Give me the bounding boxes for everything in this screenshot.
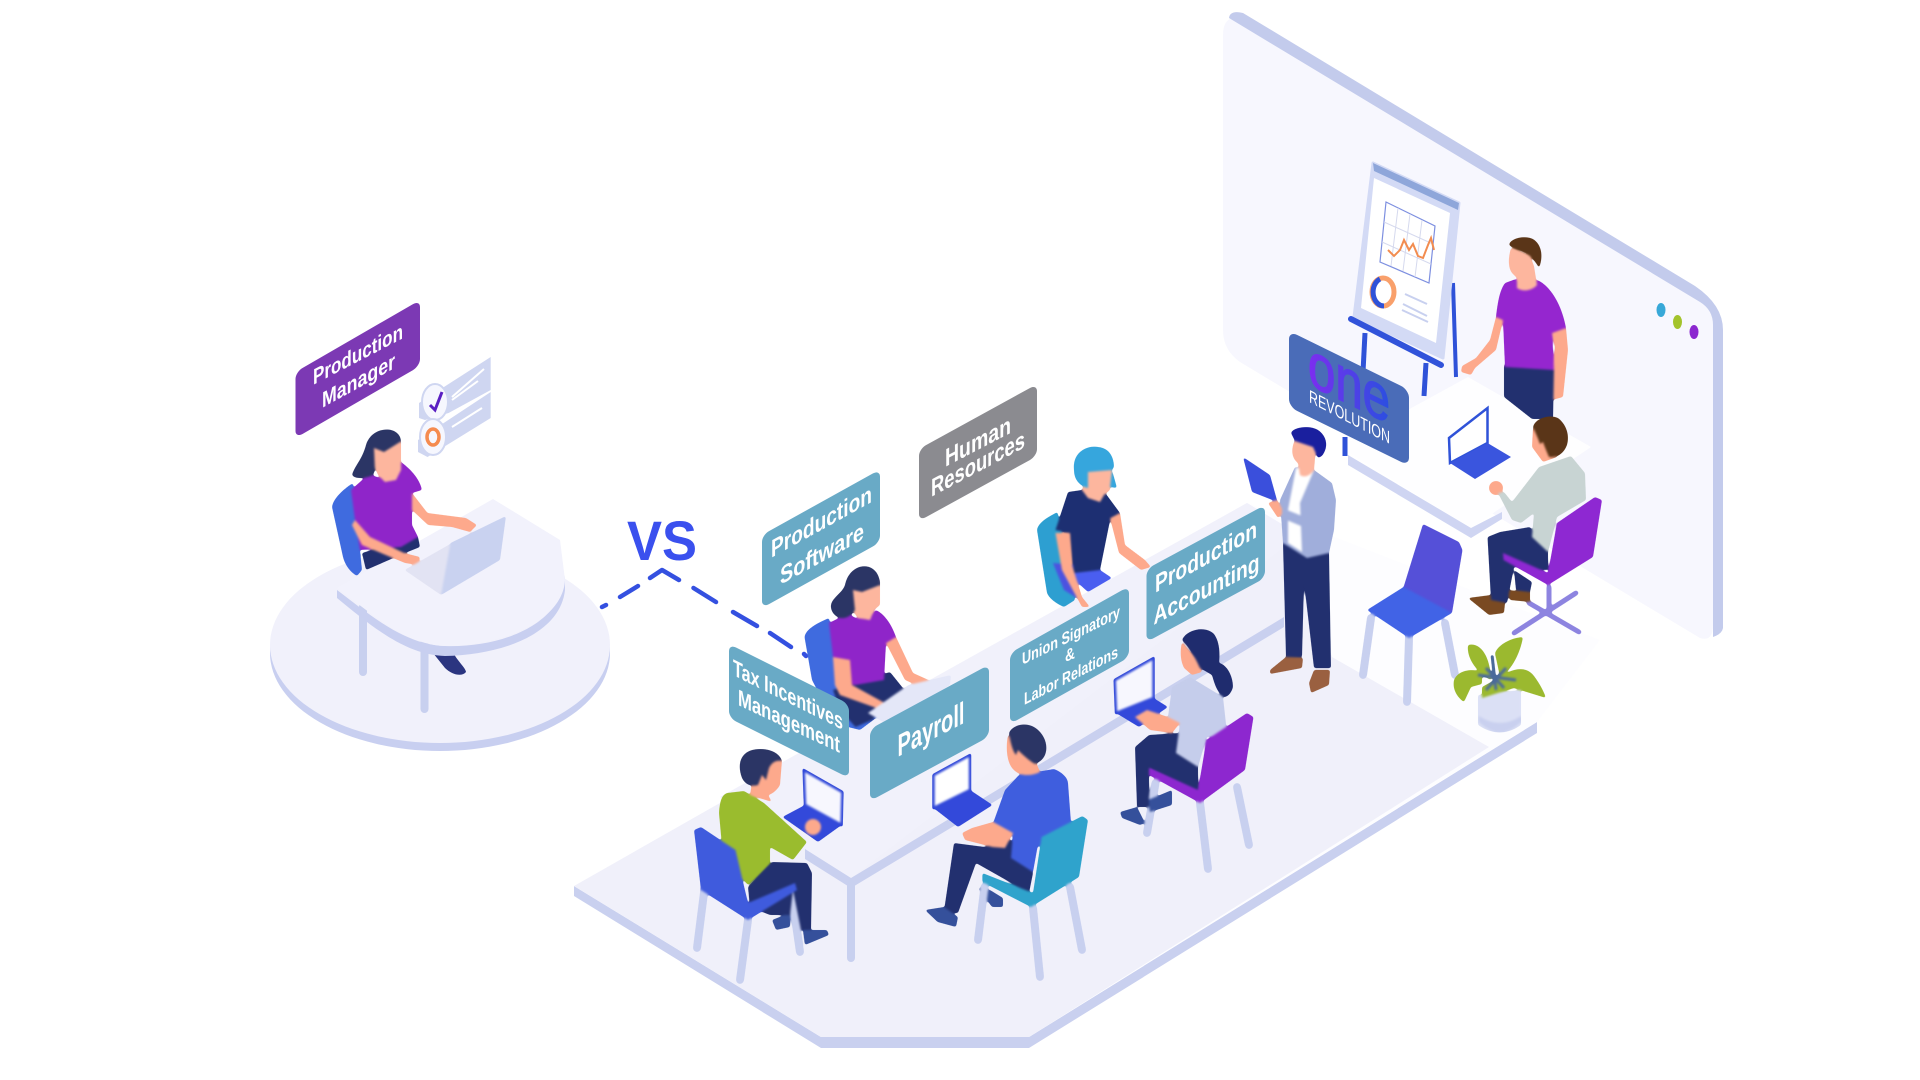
small desk with legs xyxy=(337,499,565,709)
VS heading: VS xyxy=(627,509,697,572)
sitting man with swivel chair xyxy=(1468,416,1602,633)
checklist icon xyxy=(418,357,491,457)
label: Tax Incentives Management: Management xyxy=(738,685,840,759)
line chart xyxy=(1380,202,1435,283)
standing man with tablet xyxy=(1243,427,1336,693)
label: Production Manager: Production xyxy=(313,318,403,390)
standing man in purple shirt xyxy=(1461,237,1568,419)
label: Tax Incentives Management xyxy=(729,644,849,778)
donut chart xyxy=(1372,278,1394,306)
label: Union Signatory and Labor Relations xyxy=(1010,586,1129,724)
label: Production Manager: Manager xyxy=(322,349,395,414)
label: Payroll: Payroll xyxy=(898,695,964,764)
laptop xyxy=(868,675,951,723)
label: Payroll xyxy=(870,665,989,801)
label: Production Manager xyxy=(296,300,420,438)
production manager figure xyxy=(332,429,506,595)
label: Production Software xyxy=(762,470,880,608)
laptop xyxy=(1115,658,1168,727)
laptop xyxy=(782,770,842,842)
label: Union Signatory and Labor Relations: & xyxy=(1065,643,1075,666)
label: Production Software: Production xyxy=(771,480,872,564)
label: Production Software: Software xyxy=(780,516,864,591)
easel with chart xyxy=(1351,163,1459,396)
floor platform xyxy=(574,503,1600,1048)
green-sweater man with chair and laptop xyxy=(694,749,842,980)
laptop on back desk xyxy=(1449,408,1511,479)
label: Human Resources: Resources xyxy=(931,425,1025,503)
back desk xyxy=(1340,377,1591,538)
label: Production Accounting: Production xyxy=(1155,515,1257,599)
circular platform xyxy=(270,547,610,751)
label: Tax Incentives Management: Tax Incentives xyxy=(733,655,843,736)
back wall xyxy=(1223,12,1723,639)
blue-shirt man with chair and laptop xyxy=(925,725,1088,977)
ponytail woman with chair and laptop xyxy=(1115,629,1254,869)
seated woman with teal hair xyxy=(1037,447,1151,607)
laptop xyxy=(934,755,993,827)
wall dots xyxy=(1656,303,1698,339)
laptop xyxy=(404,516,506,595)
label: Human Resources: Human xyxy=(945,410,1011,473)
sign: one Revolution: one xyxy=(1308,327,1390,438)
potted plant xyxy=(1454,637,1546,732)
label: Production Accounting xyxy=(1146,505,1265,642)
label: Union Signatory and Labor Relations: Union Signatory xyxy=(1022,602,1120,669)
empty chair xyxy=(1363,524,1462,702)
dashed connector xyxy=(602,570,806,656)
main desk xyxy=(720,503,1300,958)
sign: one Revolution: REVOLUTION xyxy=(1309,387,1390,449)
label: Production Accounting: Accounting xyxy=(1154,547,1260,631)
label: Human Resources xyxy=(919,384,1037,521)
seated woman in purple xyxy=(804,566,951,730)
label: Union Signatory and Labor Relations: Labor Relations xyxy=(1024,642,1118,709)
